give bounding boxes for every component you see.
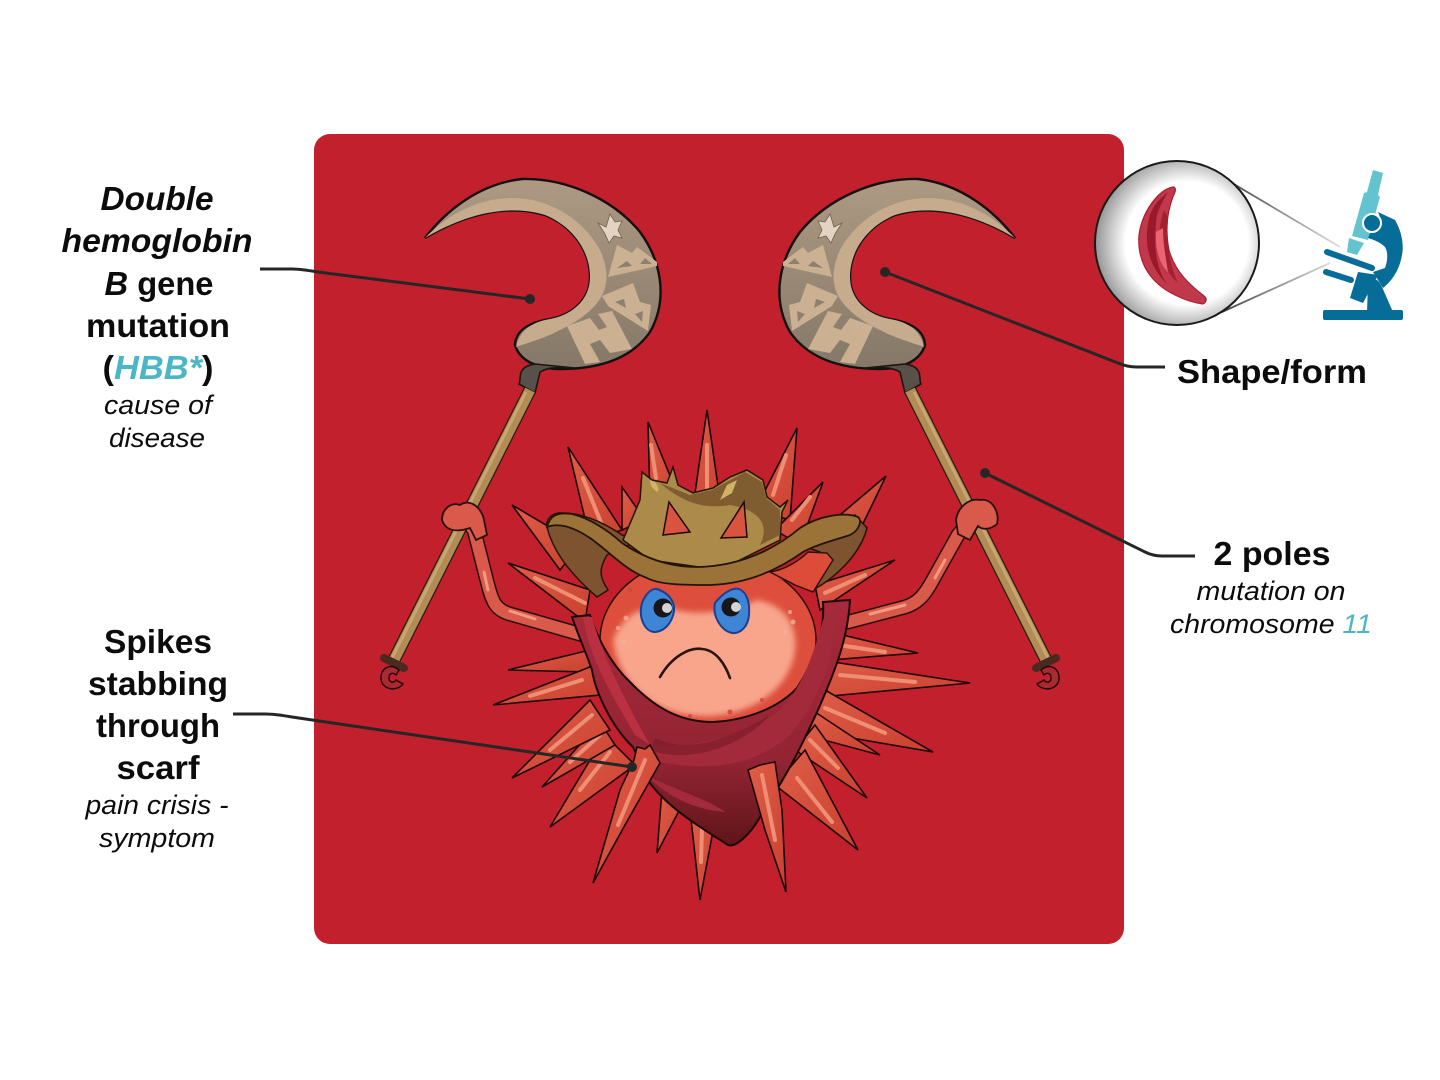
text block: spikes label: scarf: [116, 749, 201, 786]
callout: magnified sickle cell: [1095, 161, 1259, 325]
torn body flap: [770, 552, 833, 592]
icon: microscope: [1323, 170, 1403, 320]
text block: spikes label: Spikes: [104, 623, 212, 660]
leader: hemoglobin gene: [260, 269, 535, 304]
front spikes: [593, 745, 786, 892]
text block: poles label: mutation on: [1196, 576, 1346, 606]
text block: gene label: cause of: [104, 390, 215, 420]
text block: gene label: hemoglobin: [62, 222, 252, 259]
spikes through hat: [663, 502, 747, 538]
panel: red background: [314, 134, 1124, 944]
text block: spikes label: [84, 623, 229, 853]
text block: poles label: [1170, 535, 1372, 639]
text block: poles label: 2 poles: [1214, 535, 1330, 572]
text block: spikes label: symptom: [99, 823, 215, 853]
text block: gene label: [62, 180, 252, 453]
leader: poles: [980, 468, 1195, 556]
text block: spikes label: through: [96, 707, 220, 744]
text block: spikes label: pain crisis -: [84, 790, 229, 820]
eyes: [641, 589, 749, 633]
rear spikes: [493, 410, 970, 900]
illustration: sickle pole left: [381, 179, 661, 689]
cowboy hat: [547, 467, 867, 597]
text block: gene label: Double: [100, 180, 214, 217]
body: [600, 556, 816, 724]
arms and hands: [464, 518, 972, 637]
text block: poles label: chromosome 11: [1170, 609, 1372, 639]
scarf: [572, 600, 850, 845]
text block: gene label: mutation: [86, 307, 230, 344]
text block: gene label: disease: [109, 423, 205, 453]
icon: sickle cell: [1139, 187, 1206, 304]
illustration: spiky sickle cell character: [442, 410, 998, 900]
leader: shape: [880, 267, 1165, 367]
mouth: [660, 649, 730, 678]
illustration: sickle pole right: [779, 179, 1059, 689]
callout: zoom cone lines: [1222, 180, 1340, 312]
leader: spikes: [233, 714, 637, 772]
text block: gene label: (HBB*): [102, 349, 214, 386]
text block: gene label: B gene: [104, 265, 214, 302]
text block: spikes label: stabbing: [88, 665, 228, 702]
text block: shape label: Shape/form: [1177, 353, 1367, 390]
